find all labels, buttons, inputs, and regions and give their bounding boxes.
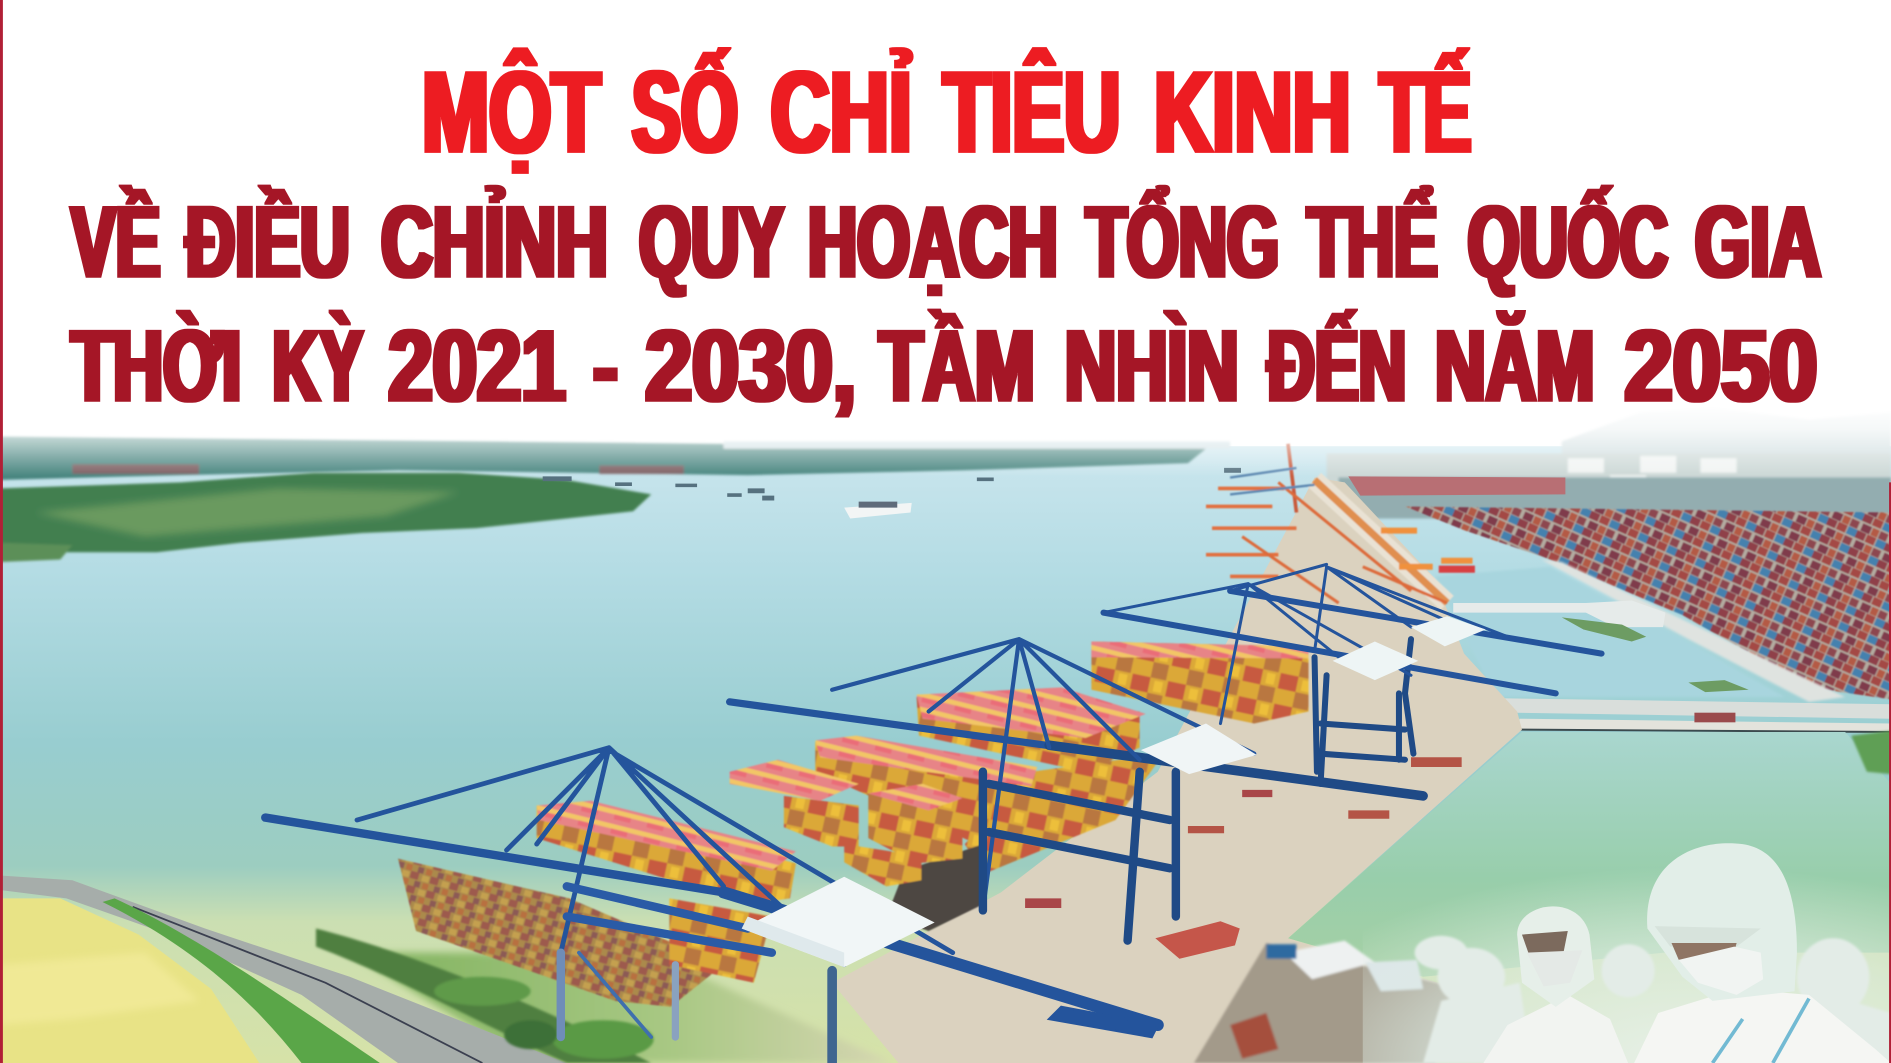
crane 4 <box>1230 564 1602 772</box>
title line 1: CHỈ <box>771 47 912 177</box>
reed bank <box>1562 617 1749 692</box>
midship side stacks <box>965 754 1164 874</box>
mangrove island <box>0 473 651 562</box>
title line 3: 2030, <box>645 308 856 423</box>
worker middle <box>1483 906 1628 1063</box>
crane 1 machinery house <box>742 877 935 967</box>
right edge rule <box>1889 482 1891 1063</box>
causeway <box>1423 697 1891 732</box>
title line 2: VỀ <box>71 184 160 299</box>
red pallets on the quay <box>1025 757 1462 959</box>
road dark divider <box>133 907 482 1063</box>
embankment vegetation <box>316 929 654 1063</box>
title line 3 <box>71 308 1817 423</box>
terminal quay <box>832 478 1522 1063</box>
container ship <box>398 642 1309 1007</box>
title line 1 <box>422 47 1471 177</box>
hull side stack <box>398 859 724 1007</box>
title line 2 <box>71 184 1821 299</box>
worker foreground <box>1634 843 1891 1063</box>
title line 3: NĂM <box>1435 308 1594 423</box>
factory workers <box>1415 843 1891 1063</box>
rear deck stacks <box>1091 642 1309 724</box>
title line 3: THỜI <box>71 308 241 423</box>
title line 3: ĐẾN <box>1268 308 1406 423</box>
harbour photo collage <box>0 404 1891 1063</box>
title line 2: QUỐC <box>1468 184 1668 299</box>
title line 1: MỘT <box>422 47 601 177</box>
title line 2: TỔNG <box>1086 184 1279 299</box>
riverside land <box>350 953 892 1063</box>
field texture <box>0 953 199 1025</box>
crane 2 <box>730 639 1423 941</box>
quay-side yard with tents <box>1194 941 1471 1063</box>
small jetty building <box>1453 601 1665 627</box>
title line 1: KINH <box>1154 47 1351 177</box>
distant hills and tanks <box>1327 408 1891 487</box>
far orange cranes <box>1206 444 1475 603</box>
warehouse roof <box>1348 476 1565 496</box>
title line 2: ĐIỀU <box>186 184 350 299</box>
right basin <box>1288 732 1891 977</box>
far shoreline <box>0 437 1230 480</box>
title <box>71 47 1821 423</box>
rice field <box>0 898 259 1063</box>
yard road <box>1541 560 1845 702</box>
title line 3: - <box>593 308 617 423</box>
title line 3: 2021 <box>388 308 566 423</box>
title line 2: QUY <box>639 184 784 299</box>
title line 3: TẦM <box>879 308 1035 423</box>
hull shadow <box>886 844 983 931</box>
title line 3: KỲ <box>273 308 363 423</box>
title line 1: TẾ <box>1380 47 1471 177</box>
crane 1 <box>265 748 1158 1063</box>
small ships on the river <box>543 468 1241 519</box>
crane 3 <box>1103 584 1556 784</box>
cranes <box>265 564 1602 1063</box>
sky haze over horizon <box>0 404 1891 476</box>
container yard <box>1405 506 1891 699</box>
worker background group <box>1415 936 1891 1063</box>
cleanroom backdrop <box>1363 832 1891 1063</box>
mangroves at right edge <box>1851 731 1891 774</box>
title line 2: CHỈNH <box>381 184 608 299</box>
title line 2: HOẠCH <box>808 184 1058 299</box>
road <box>0 875 567 1063</box>
title line 3: NHÌN <box>1065 308 1239 423</box>
title line 2: THỂ <box>1307 184 1438 299</box>
inner basin <box>1435 567 1785 697</box>
title line 3: 2050 <box>1624 308 1817 423</box>
left edge rule <box>0 0 3 1063</box>
river water <box>0 446 1891 1063</box>
title line 1: TIÊU <box>943 47 1120 177</box>
title line 2: GIA <box>1695 184 1821 299</box>
road hedge <box>103 898 380 1063</box>
backland beyond the terminal <box>1339 478 1891 519</box>
title line 1: SỐ <box>632 47 738 177</box>
